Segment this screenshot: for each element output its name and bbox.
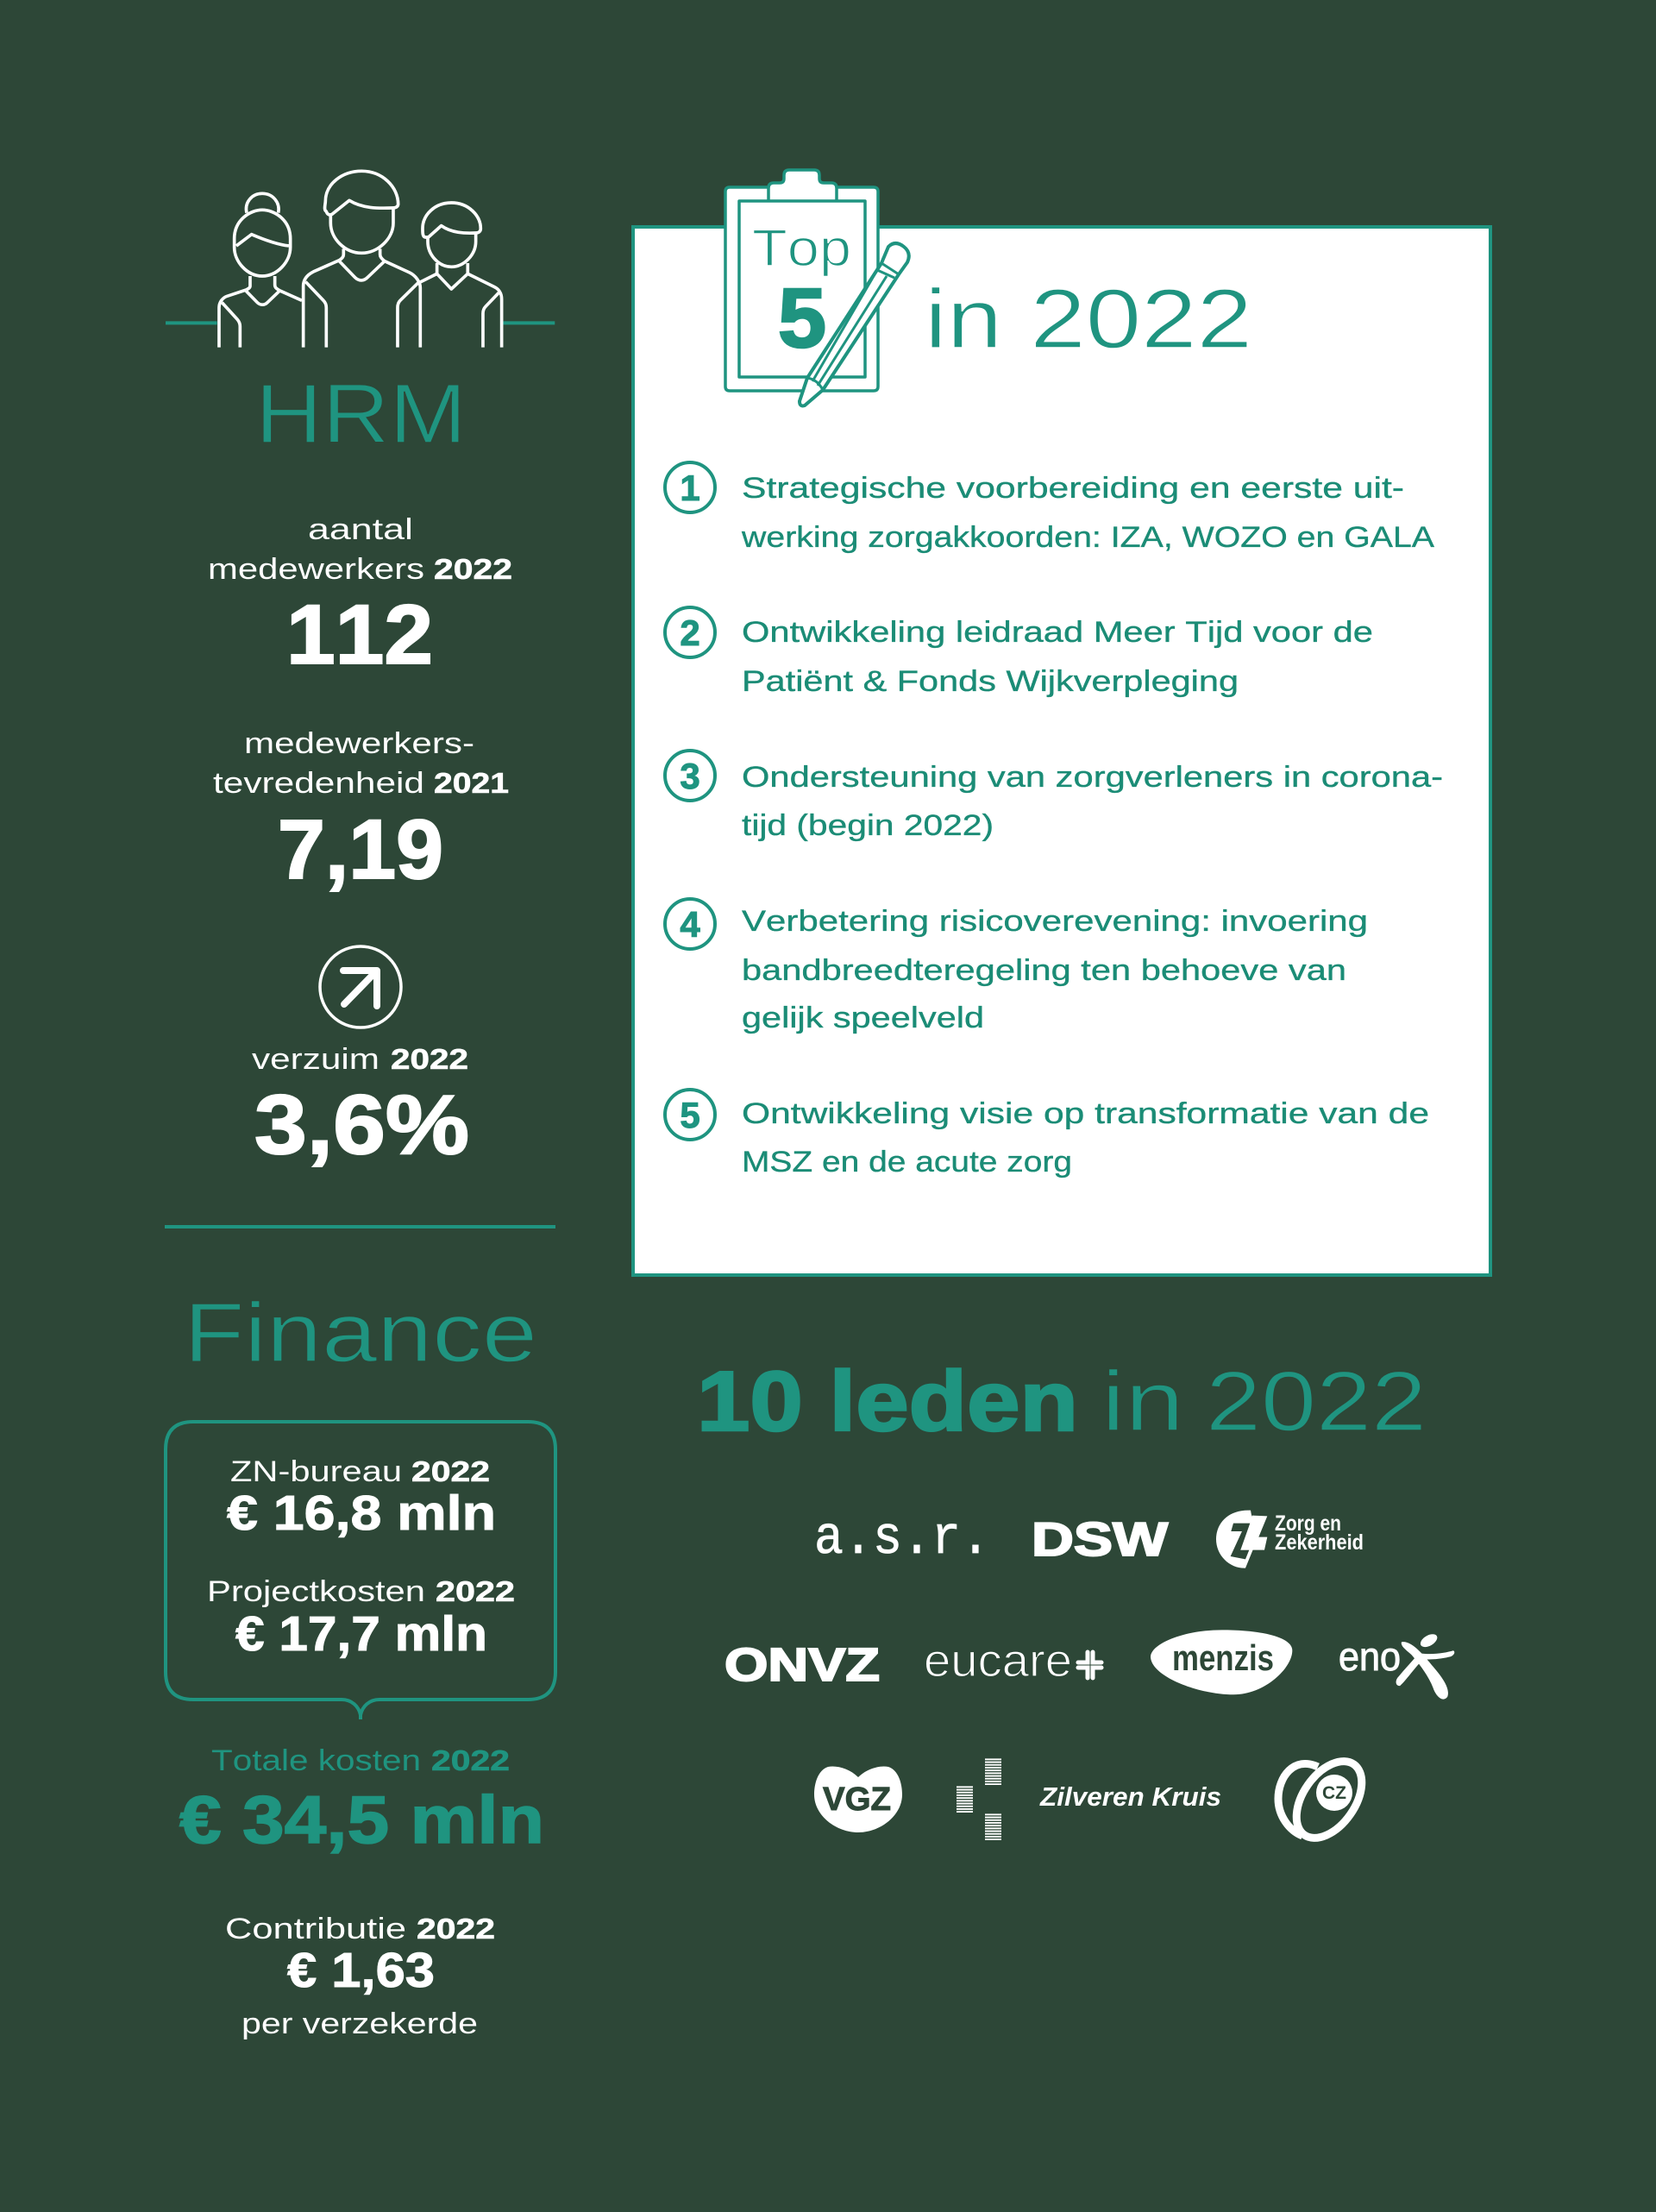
list item 2 bbox=[665, 607, 1373, 698]
icon: three people with horizon line bbox=[166, 171, 555, 348]
stat: aantal medewerkers: 112 bbox=[286, 588, 433, 682]
logo: eucare: eucare bbox=[924, 1635, 1072, 1687]
list item 4: gelijk speelveld bbox=[742, 1002, 984, 1034]
stat: Contributie: Contributie bbox=[225, 1913, 406, 1945]
list item 5 bbox=[665, 1090, 1429, 1178]
heading: HRM: HRM bbox=[255, 367, 467, 461]
logo: Zorg en Zekerheid: Zekerheid bbox=[1275, 1530, 1364, 1555]
list item 3: Ondersteuning van zorgverleners in corona- bbox=[742, 761, 1443, 794]
stat: ZN-bureau: € 16,8 mln bbox=[227, 1486, 496, 1541]
list item 3 bbox=[665, 751, 1443, 842]
logo: eno: eno bbox=[1339, 1634, 1401, 1679]
logo: Zorg en Zekerheid: Zorg en bbox=[1275, 1511, 1341, 1536]
list item 1: Strategische voorbereiding en eerste uit- bbox=[742, 472, 1404, 505]
logo: VGZ: VGZ bbox=[823, 1782, 891, 1818]
stat: medewerkerstevredenheid bbox=[213, 727, 509, 896]
stat: medewerkerstevredenheid: medewerkers- bbox=[244, 727, 474, 760]
logo: menzis bbox=[1151, 1630, 1292, 1694]
logo: CZ bbox=[1278, 1750, 1375, 1850]
stat: aantal medewerkers: aantal bbox=[308, 513, 413, 546]
logo: DSW: DSW bbox=[1032, 1512, 1168, 1566]
panel: Finance bbox=[166, 1285, 555, 2040]
heading: 10 leden in 2022: 10 leden bbox=[697, 1354, 1078, 1448]
stat: Contributie: 2022 bbox=[417, 1913, 495, 1945]
list item 4: 4 bbox=[680, 904, 700, 945]
stat: aantal medewerkers: 2022 bbox=[434, 553, 512, 585]
stat: medewerkerstevredenheid: 2021 bbox=[434, 767, 509, 799]
logo: a.s.r.: a.s.r. bbox=[814, 1508, 990, 1569]
stat: verzuim: 2022 bbox=[391, 1043, 468, 1075]
icon: clipboard bbox=[725, 170, 878, 391]
list item 5: Ontwikkeling visie op transformatie van de bbox=[742, 1097, 1429, 1130]
icon: arrow up-right in circle bbox=[320, 946, 401, 1027]
stat: aantal medewerkers bbox=[208, 513, 512, 682]
stat: aantal medewerkers: medewerkers bbox=[208, 553, 424, 586]
logo: VGZ bbox=[814, 1767, 902, 1832]
list item 1 bbox=[665, 462, 1434, 554]
clipboard label: 5: 5 bbox=[778, 271, 826, 365]
clipboard label: Top: Top bbox=[752, 219, 851, 277]
stat: ZN-bureau: ZN-bureau bbox=[230, 1455, 402, 1488]
list item 2: 2 bbox=[680, 613, 700, 653]
stat: medewerkerstevredenheid: 7,19 bbox=[278, 802, 443, 896]
stat: Projectkosten: Projectkosten bbox=[207, 1575, 425, 1608]
list item 4 bbox=[665, 899, 1368, 1034]
heading: Finance: Finance bbox=[184, 1285, 537, 1379]
stat: medewerkerstevredenheid: tevredenheid bbox=[213, 767, 424, 800]
stat: Totale kosten: 2022 bbox=[431, 1744, 510, 1776]
list item 2: Patiënt & Fonds Wijkverpleging bbox=[742, 665, 1239, 698]
logo: Zilveren Kruis bbox=[957, 1758, 1221, 1840]
heading: in 2022: in 2022 bbox=[925, 272, 1252, 366]
panel: Top 5 in 2022 bbox=[633, 170, 1490, 1275]
logo: eno bbox=[1339, 1631, 1454, 1700]
stat: Totale kosten: € 34,5 mln bbox=[179, 1782, 544, 1857]
list item 5: 5 bbox=[680, 1095, 700, 1135]
stat: verzuim bbox=[252, 1043, 469, 1172]
list item 5: MSZ en de acute zorg bbox=[742, 1146, 1072, 1178]
stat: Contributie: per verzekerde bbox=[242, 2008, 478, 2040]
stat: Contributie: € 1,63 bbox=[287, 1943, 435, 1998]
list item 3: 3 bbox=[680, 756, 700, 796]
logo: menzis: menzis bbox=[1172, 1637, 1274, 1678]
stat: Totale kosten: Totale kosten bbox=[211, 1744, 421, 1777]
stat: Projectkosten bbox=[207, 1575, 515, 1662]
heading: 10 leden in 2022 bbox=[697, 1354, 1427, 1448]
logo: CZ: CZ bbox=[1322, 1783, 1346, 1803]
stat: ZN-bureau: 2022 bbox=[411, 1455, 490, 1487]
list item 1: werking zorgakkoorden: IZA, WOZO en GALA bbox=[741, 521, 1434, 554]
list item 4: bandbreedteregeling ten behoeve van bbox=[742, 954, 1346, 987]
stat: Contributie bbox=[225, 1913, 495, 2040]
heading: 10 leden in 2022: 2022 bbox=[1206, 1354, 1427, 1448]
stat: verzuim: 3,6% bbox=[254, 1078, 469, 1172]
stat: ZN-bureau bbox=[227, 1455, 496, 1541]
stat: Projectkosten: € 17,7 mln bbox=[235, 1606, 487, 1662]
logo: ONVZ: ONVZ bbox=[724, 1639, 880, 1691]
logo: Zorg en Zekerheid bbox=[1216, 1511, 1364, 1568]
icon: pencil bbox=[800, 243, 909, 405]
stat: Projectkosten: 2022 bbox=[436, 1575, 515, 1607]
logo: Zilveren Kruis: Zilveren Kruis bbox=[1039, 1782, 1221, 1812]
stat: Totale kosten bbox=[179, 1744, 544, 1857]
panel: HRM bbox=[166, 171, 555, 1172]
list item 1: 1 bbox=[680, 468, 700, 508]
white card bbox=[633, 227, 1490, 1275]
list item 2: Ontwikkeling leidraad Meer Tijd voor de bbox=[742, 616, 1373, 649]
list item 4: Verbetering risicoverevening: invoering bbox=[742, 905, 1368, 938]
panel: 10 leden bbox=[697, 1354, 1454, 1850]
list item 3: tijd (begin 2022) bbox=[742, 809, 994, 842]
stat: verzuim: verzuim bbox=[252, 1043, 380, 1076]
callout box with pointer bbox=[166, 1422, 555, 1719]
heading: 10 leden in 2022: in bbox=[1101, 1354, 1184, 1448]
